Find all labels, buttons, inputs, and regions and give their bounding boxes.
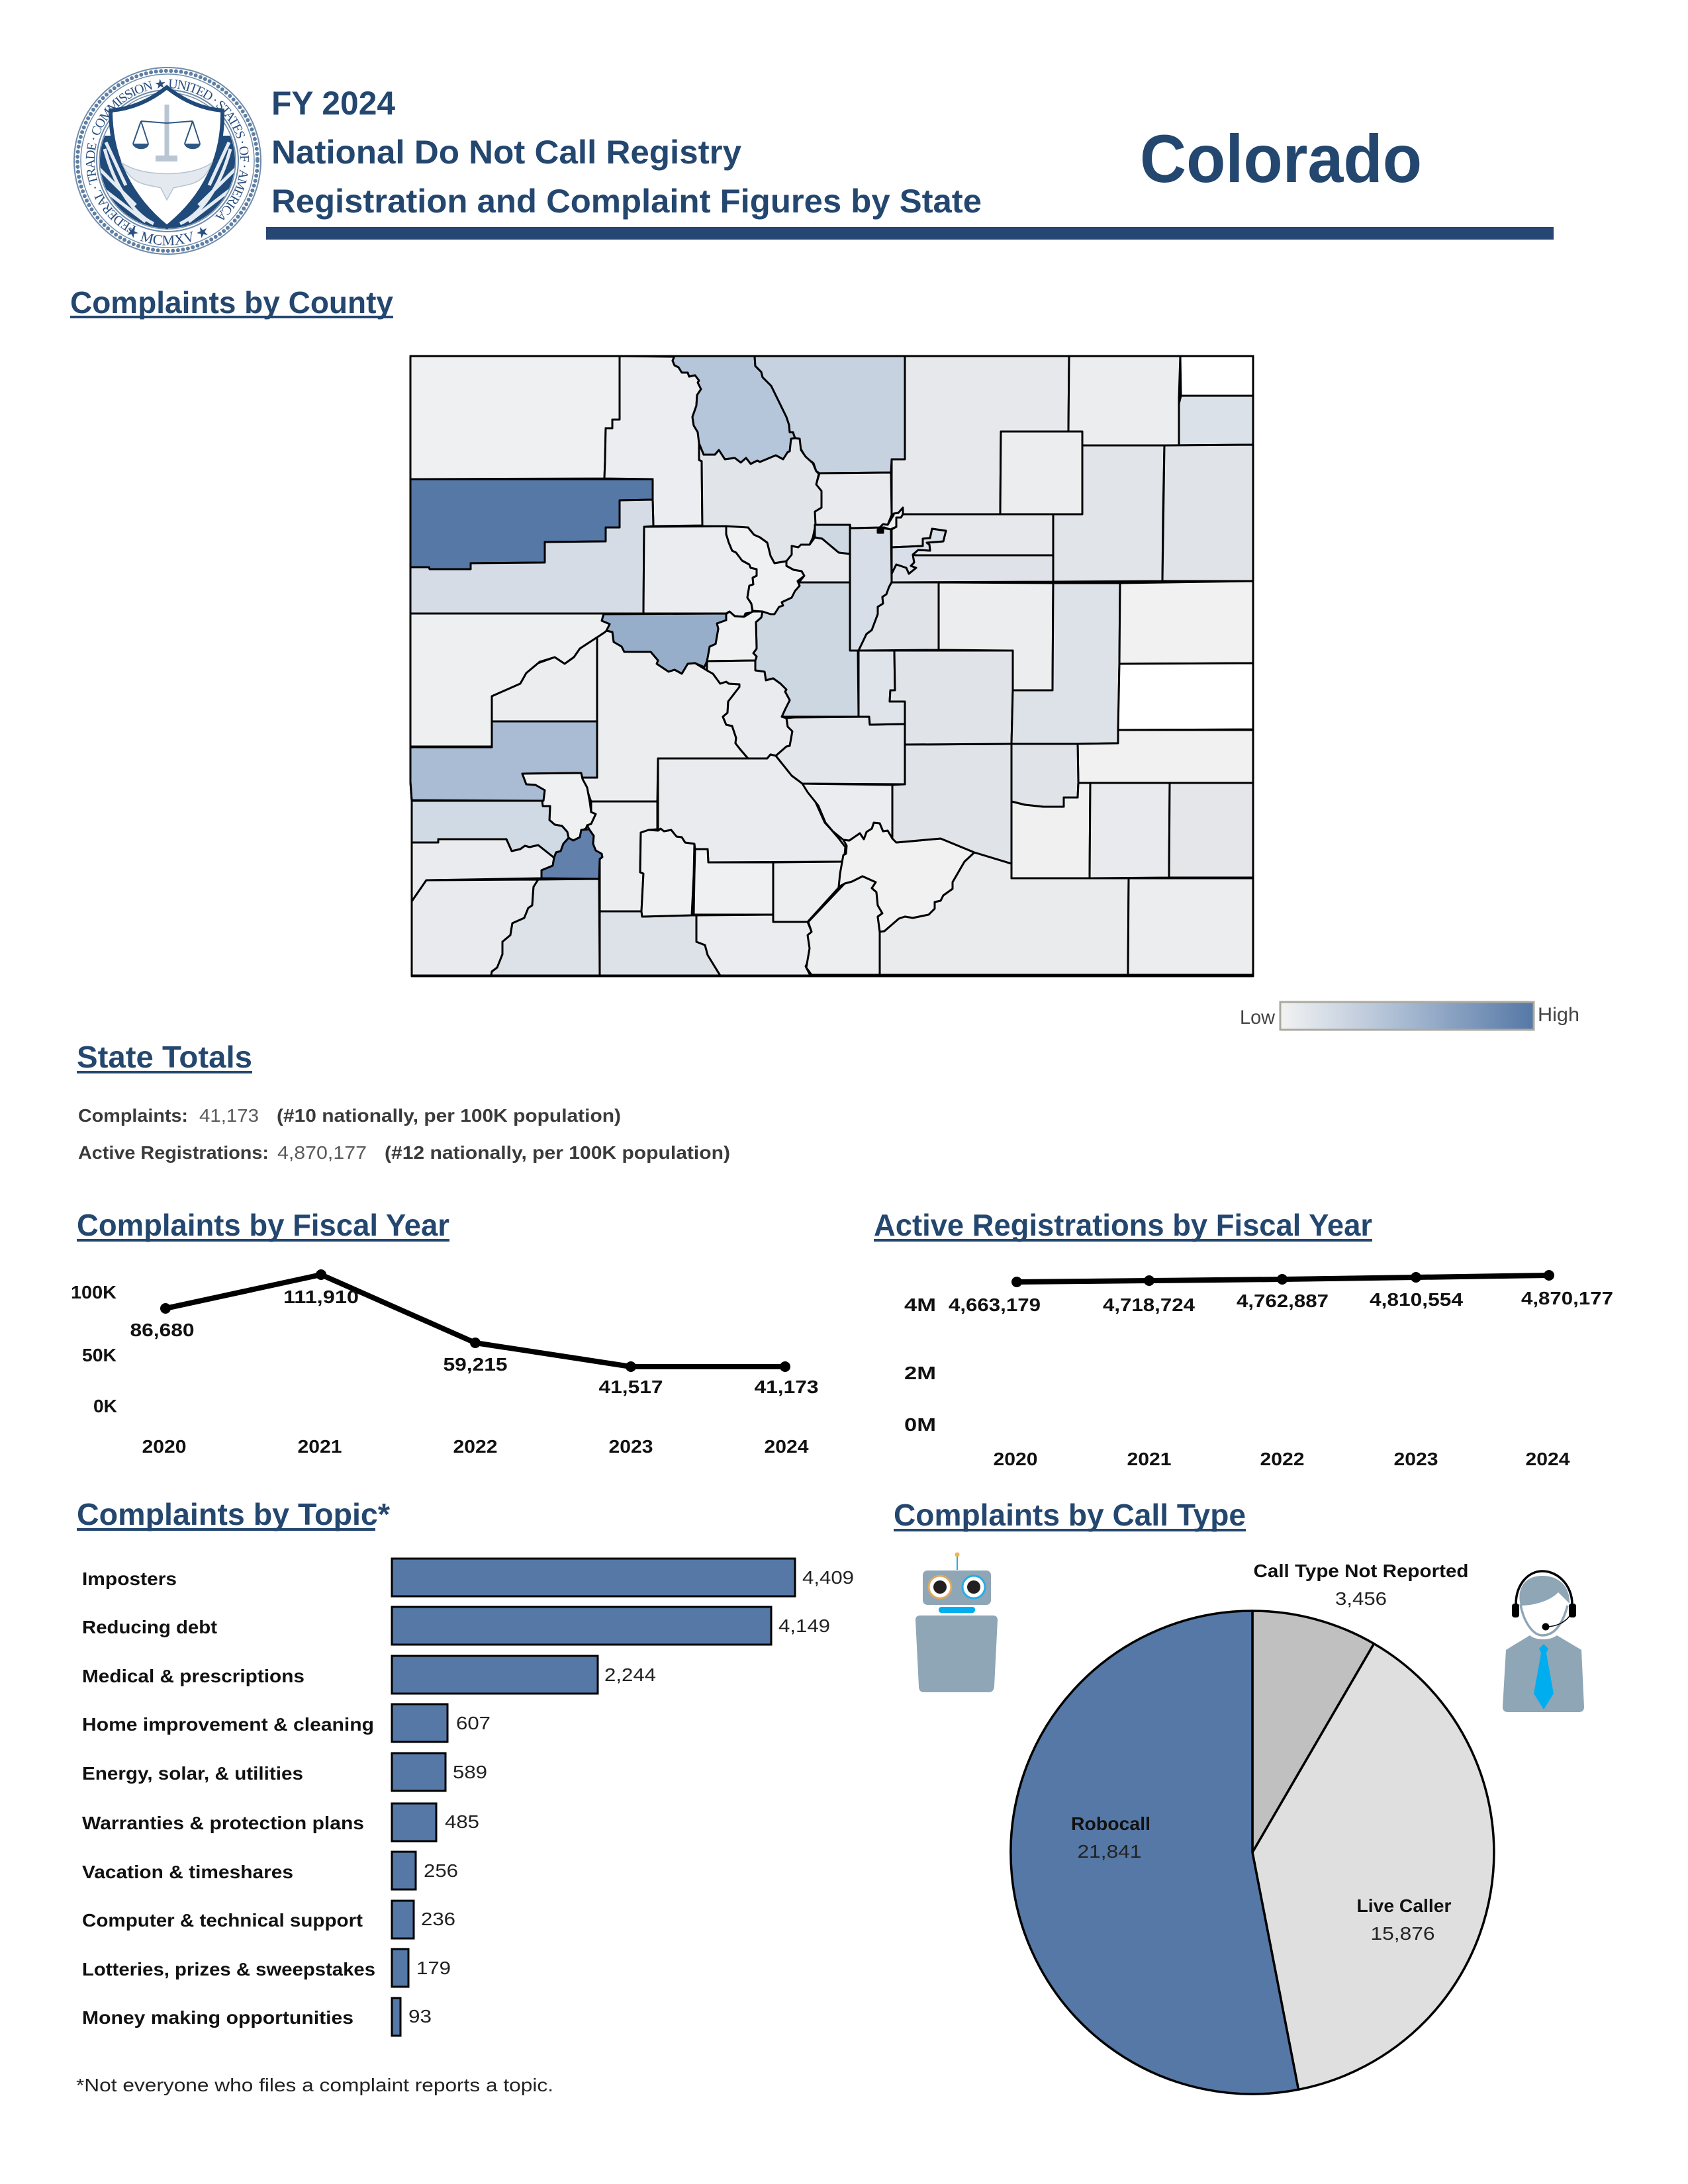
line chart: active registrations by fiscal year: 0M (904, 1414, 936, 1435)
line chart: complaints by fiscal year: 2022 (453, 1436, 498, 1457)
line chart: active registrations by fiscal year: 4,762,887 (1237, 1291, 1329, 1311)
bar chart: complaints by topic: Computer & technical support (82, 1910, 363, 1931)
line chart: complaints by fiscal year: 2023 (609, 1436, 653, 1457)
bar chart: complaints by topic: 236 (421, 1909, 455, 1929)
heading: complaints by fiscal year: Complaints by Fiscal Year (77, 1208, 449, 1242)
footnote: *Not everyone who files a complaint reports a topic. (76, 2075, 553, 2095)
state totals: complaints: Complaints: (78, 1105, 188, 1126)
line chart: complaints by fiscal year: 2021 (298, 1436, 342, 1457)
line chart: complaints by fiscal year: 41,173 (755, 1377, 818, 1397)
title block (271, 85, 982, 220)
legend: low to high: High (1538, 1004, 1579, 1026)
line chart: complaints by fiscal year: 2020 (142, 1436, 187, 1457)
heading: complaints by call type: Complaints by Call Type (894, 1498, 1246, 1532)
bar chart: complaints by topic: 2,244 (604, 1664, 656, 1685)
pie label: robocall: Robocall (1071, 1813, 1150, 1834)
legend: low to high (1240, 1002, 1579, 1030)
line chart: complaints by fiscal year: 111,910 (283, 1287, 359, 1307)
pie label: robocall: 21,841 (1078, 1841, 1141, 1862)
state totals: active registrations: 4,870,177 (277, 1142, 367, 1163)
bar chart: complaints by topic: 93 (408, 2006, 432, 2026)
line chart: complaints by fiscal year: 50K (82, 1345, 117, 1365)
heading: state totals: State Totals (77, 1040, 252, 1074)
bar chart: complaints by topic: 485 (445, 1811, 479, 1832)
line chart: active registrations by fiscal year: 2M (904, 1363, 936, 1383)
line chart: complaints by fiscal year: 2024 (764, 1436, 809, 1457)
line chart: active registrations by fiscal year: 4,870,177 (1521, 1288, 1613, 1308)
bar chart: complaints by topic: 607 (456, 1713, 491, 1733)
line chart: active registrations by fiscal year: 2020 (993, 1449, 1038, 1469)
line chart: complaints by fiscal year: 0K (93, 1396, 117, 1416)
bar chart: complaints by topic: 4,409 (802, 1567, 854, 1588)
call type pie chart (1011, 1611, 1494, 2094)
title block: FY 2024 (271, 85, 395, 122)
bar chart: complaints by topic: Lotteries, prizes & sweepstakes (82, 1959, 375, 1979)
line chart: complaints by fiscal year (71, 1269, 818, 1457)
bar chart: complaints by topic: 256 (424, 1860, 458, 1881)
line chart: active registrations by fiscal year (904, 1270, 1613, 1469)
line chart: active registrations by fiscal year: 4M (904, 1295, 936, 1315)
pie label: live caller: 15,876 (1370, 1923, 1435, 1944)
line chart: complaints by fiscal year: 100K (71, 1282, 117, 1302)
pie label: call type not reported: Call Type Not Reported (1254, 1561, 1468, 1581)
icon: call center agent (1503, 1571, 1584, 1712)
line chart: active registrations by fiscal year: 2022 (1260, 1449, 1304, 1469)
icon: FTC seal: ★ MCMXV ★ (127, 227, 208, 245)
state totals: active registrations: Active Registrations: (78, 1142, 269, 1163)
bar chart: complaints by topic: Vacation & timeshares (82, 1862, 293, 1882)
bar chart: complaints by topic: 4,149 (778, 1615, 830, 1636)
line chart: complaints by fiscal year: 41,517 (598, 1377, 663, 1397)
pie label: call type not reported (1254, 1561, 1468, 1609)
line chart: active registrations by fiscal year: 2023 (1394, 1449, 1438, 1469)
icon: FTC seal: FEDERAL · TRADE · COMMISSION ★ UNITED · STATES · OF · AMERICA (86, 79, 249, 233)
bar chart: complaints by topic: Reducing debt (82, 1617, 217, 1637)
pie label: robocall (1071, 1813, 1150, 1862)
line chart: active registrations by fiscal year: 4,718,724 (1103, 1295, 1195, 1315)
pie label: call type not reported: 3,456 (1335, 1588, 1387, 1609)
line chart: complaints by fiscal year: 86,680 (130, 1320, 195, 1340)
header rule (266, 227, 1554, 240)
bar chart: complaints by topic: Medical & prescriptions (82, 1666, 305, 1686)
state totals: complaints: (#10 nationally, per 100K population) (277, 1105, 621, 1126)
pie label: live caller: Live Caller (1357, 1895, 1452, 1916)
line chart: active registrations by fiscal year: 2021 (1127, 1449, 1172, 1469)
legend: low to high: Low (1240, 1007, 1275, 1028)
bar chart: complaints by topic: Home improvement & cleaning (82, 1714, 374, 1735)
line chart: active registrations by fiscal year: 4,810,554 (1370, 1289, 1463, 1310)
state totals: complaints (78, 1105, 621, 1126)
icon: robot (915, 1553, 998, 1692)
line chart: active registrations by fiscal year: 2024 (1525, 1449, 1570, 1469)
state name: Colorado (1140, 121, 1422, 197)
heading: complaints by county: Complaints by County (70, 285, 393, 320)
line chart: active registrations by fiscal year: 4,663,179 (949, 1295, 1041, 1315)
line chart: complaints by fiscal year: 59,215 (444, 1354, 507, 1375)
title block: Registration and Complaint Figures by State (271, 183, 982, 220)
state totals: complaints: 41,173 (199, 1105, 259, 1126)
bar chart: complaints by topic: Money making opportunities (82, 2007, 353, 2028)
bar chart: complaints by topic (82, 1559, 854, 2036)
heading: active registrations by fiscal year: Active Registrations by Fiscal Year (874, 1208, 1372, 1242)
pie label: live caller (1357, 1895, 1452, 1944)
state totals: active registrations (78, 1142, 730, 1163)
bar chart: complaints by topic: 589 (453, 1762, 487, 1782)
state totals: active registrations: (#12 nationally, per 100K population) (385, 1142, 730, 1163)
county choropleth map (410, 356, 1253, 976)
bar chart: complaints by topic: Imposters (82, 1569, 177, 1589)
title block: National Do Not Call Registry (271, 134, 741, 171)
bar chart: complaints by topic: Energy, solar, & utilities (82, 1763, 303, 1784)
heading: complaints by topic: Complaints by Topic* (77, 1497, 390, 1531)
bar chart: complaints by topic: 179 (416, 1958, 451, 1978)
bar chart: complaints by topic: Warranties & protection plans (82, 1813, 364, 1833)
